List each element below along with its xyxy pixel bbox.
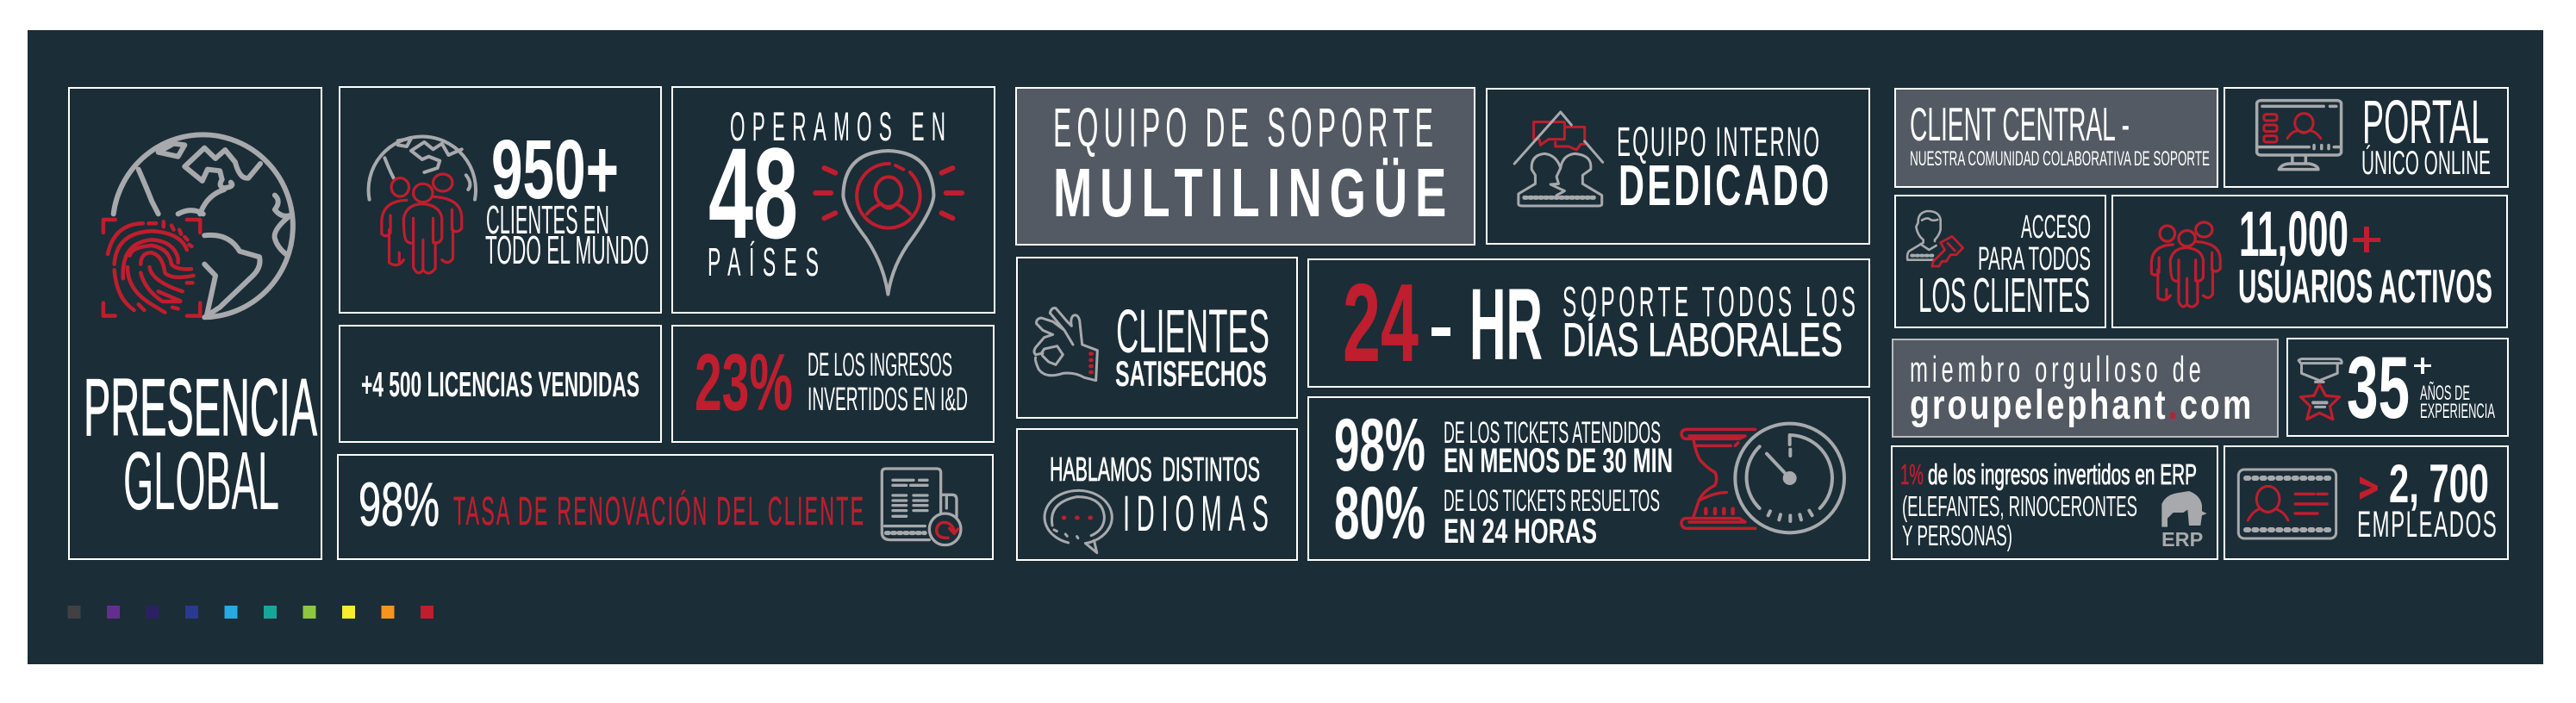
panel: tickets <box>1308 397 1869 560</box>
panel: clientes satisfechos <box>1017 258 1297 418</box>
panel: acceso para todos <box>1895 196 2105 327</box>
panel: equipo interno dedicado <box>1487 89 1869 244</box>
panel: 2,700 empleados <box>2224 446 2508 559</box>
stat: 24: 24 <box>1343 261 1419 385</box>
icon: greater than <box>2360 476 2378 500</box>
icon: ERP elephant: ERP <box>2161 528 2203 551</box>
panel: 950+ clientes <box>340 87 661 313</box>
text: acceso para todos los clientes <box>1918 209 2091 323</box>
panel: presencia global: PRESENCIA <box>84 362 317 452</box>
text: equipo interno: EQUIPO INTERNO <box>1617 120 1819 165</box>
panel: acceso para todos: LOS CLIENTES <box>1918 268 2090 323</box>
stat: 98%: 98% <box>359 471 440 539</box>
text: elefantes rinocerontes y personas <box>1902 490 2137 551</box>
panel: 35+ anos <box>2287 339 2508 437</box>
stat: 950+: 950+ <box>491 122 619 216</box>
text: anos de experiencia: AÑOS DE <box>2420 382 2470 405</box>
panel: groupelephant <box>1893 339 2278 437</box>
text: acceso para todos los clientes: PARA TODOS <box>1978 241 2091 277</box>
icon: ERP elephant <box>2161 491 2207 551</box>
text: dedicado: DEDICADO <box>1619 153 1829 217</box>
panel: 24-hr soporte <box>1308 259 1869 387</box>
panel: presencia global: GLOBAL <box>123 435 279 527</box>
icon: people group <box>2151 222 2220 307</box>
icon: ID card <box>2238 470 2336 538</box>
text: hablamos distintos: HABLAMOS DISTINTOS <box>1050 451 1260 488</box>
text: comunidad colaborativa: NUESTRA COMUNIDAD COLABORATIVA DE SOPORTE <box>1910 147 2210 171</box>
label: clientes en todo el mundo <box>485 197 649 272</box>
panel: tasa de renovacion <box>338 455 993 559</box>
text: tickets atendidos: DE LOS TICKETS ATENDIDOS <box>1444 416 1661 450</box>
stat: 80% tickets: 80% <box>1334 472 1425 555</box>
icon: globe with people <box>369 136 476 273</box>
icon: globe with fingerprint <box>103 134 293 317</box>
text: miembro orgulloso de: miembro orgulloso de <box>1910 351 2201 390</box>
legend: colour squares <box>67 606 433 619</box>
text: empleados: EMPLEADOS <box>2357 504 2497 545</box>
label: paises: PAÍSES <box>708 240 819 284</box>
icon: location pin <box>815 151 962 295</box>
text: clientes: CLIENTES <box>1116 298 1269 366</box>
text: acceso para todos los clientes: ACCESO <box>2021 209 2091 246</box>
icon: plus <box>2414 358 2431 374</box>
label: operamos en: OPERAMOS EN <box>730 104 945 149</box>
text: ingresos invertidos en ERP: de los ingresos invertidos en ERP <box>1928 458 2197 490</box>
panel: 950+ clientes: TODO EL MUNDO <box>485 227 649 272</box>
label: tasa de renovacion del cliente: TASA DE RENOVACIÓN DEL CLIENTE <box>453 488 864 533</box>
icon: ok hand <box>1034 308 1097 381</box>
text: idiomas: IDIOMAS <box>1123 485 1269 542</box>
icon: person with key <box>1907 211 1963 266</box>
label: de los ingresos invertidos <box>808 347 968 418</box>
text: soporte todos los: SOPORTE TODOS LOS <box>1562 279 1856 326</box>
heading: equipo de soporte: EQUIPO DE SOPORTE <box>1053 96 1433 159</box>
text: satisfechos: SATISFECHOS <box>1115 353 1267 394</box>
panel: 24-hr soporte: HR <box>1469 268 1543 382</box>
panel: client central <box>1895 89 2217 187</box>
panel: 1% ERP <box>1892 446 2217 559</box>
text: elefantes rinocerontes y personas: Y PERSONAS) <box>1902 519 2012 551</box>
icon: speech bubble <box>1045 490 1112 553</box>
text: dias laborales: DÍAS LABORALES <box>1562 313 1843 366</box>
panel: equipo de soporte multilingue <box>1016 88 1475 245</box>
icon: hourglass and clock <box>1681 424 1844 532</box>
stat: 2,700: 2, 700 <box>2389 454 2489 514</box>
text: tickets atendidos: EN MENOS DE 30 MIN <box>1444 442 1673 480</box>
text: tickets atendidos <box>1444 416 1673 480</box>
text: licencias vendidas: +4 500 LICENCIAS VENDIDAS <box>361 364 639 404</box>
icon: red plus <box>2353 227 2380 252</box>
icon: renewal document <box>882 469 961 545</box>
panel: presencia global <box>69 88 321 559</box>
label: de los ingresos invertidos: DE LOS INGRESOS <box>808 347 952 383</box>
label: clientes en todo el mundo: CLIENTES EN <box>486 197 609 242</box>
panel: portal unico online <box>2224 88 2508 187</box>
panel: hablamos distintos idiomas <box>1017 429 1297 560</box>
panel: operamos en 48 paises <box>672 87 995 313</box>
stat: 48: 48 <box>708 121 798 265</box>
panel: 23% ingresos <box>672 326 994 442</box>
text: tickets resueltos: EN 24 HORAS <box>1444 513 1597 551</box>
icon: team in house <box>1514 112 1603 206</box>
stat: 1%: 1% <box>1900 458 1924 490</box>
icon: medal <box>2298 359 2342 420</box>
stat: 23%: 23% <box>695 337 793 427</box>
text: tickets resueltos <box>1444 484 1660 551</box>
panel: licencias vendidas <box>340 326 661 442</box>
icon: monitor <box>2257 101 2342 170</box>
text: anos de experiencia: EXPERIENCIA <box>2420 400 2495 423</box>
text: elefantes rinocerontes y personas: (ELEFANTES, RINOCERONTES <box>1902 490 2137 522</box>
label: de los ingresos invertidos: INVERTIDOS EN I&D <box>808 382 968 418</box>
text: groupelephant.com: groupelephant.com <box>1910 383 2251 428</box>
dash <box>1431 327 1450 336</box>
stat: 35: 35 <box>2347 339 2410 437</box>
panel: tickets: DE LOS TICKETS RESUELTOS <box>1444 484 1660 518</box>
panel: usuarios activos <box>2112 196 2507 327</box>
heading: client central: CLIENT CENTRAL - <box>1910 97 2130 151</box>
heading: multilingue: MULTILINGÜE <box>1053 155 1446 232</box>
stat: 11,000: 11,000 <box>2239 198 2348 270</box>
stat: 98% tickets: 98% <box>1334 404 1425 487</box>
text: anos de experiencia <box>2420 382 2495 423</box>
